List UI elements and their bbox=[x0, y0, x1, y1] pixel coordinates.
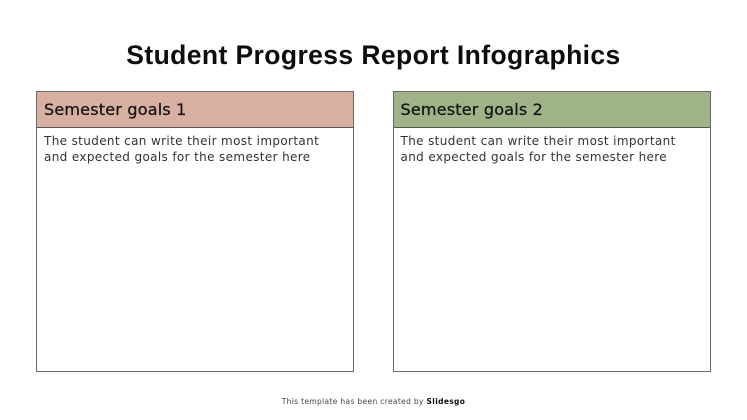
text block: goals 1 description: and expected goals for the semester here bbox=[44, 150, 311, 164]
footer credit: This template has been created by Slidesgo bbox=[282, 397, 465, 406]
text block: goals 2 description bbox=[400, 134, 676, 164]
text block: goals 2 description: The student can write their most important bbox=[400, 134, 676, 148]
text block: goals 1 description: The student can write their most important bbox=[44, 134, 319, 148]
panel heading: semester goals 2 bbox=[394, 92, 710, 128]
panel heading: semester goals 2: Semester goals 2 bbox=[400, 100, 543, 119]
title: Student Progress Report Infographics bbox=[126, 40, 621, 70]
panel: semester goals 2 bbox=[392, 91, 710, 372]
panel heading: semester goals 1 bbox=[37, 92, 353, 128]
text block: goals 2 description: and expected goals for the semester here bbox=[400, 150, 667, 164]
panel: semester goals 1 bbox=[36, 91, 354, 372]
text block: goals 1 description bbox=[44, 134, 319, 164]
panel heading: semester goals 1: Semester goals 1 bbox=[44, 100, 187, 119]
